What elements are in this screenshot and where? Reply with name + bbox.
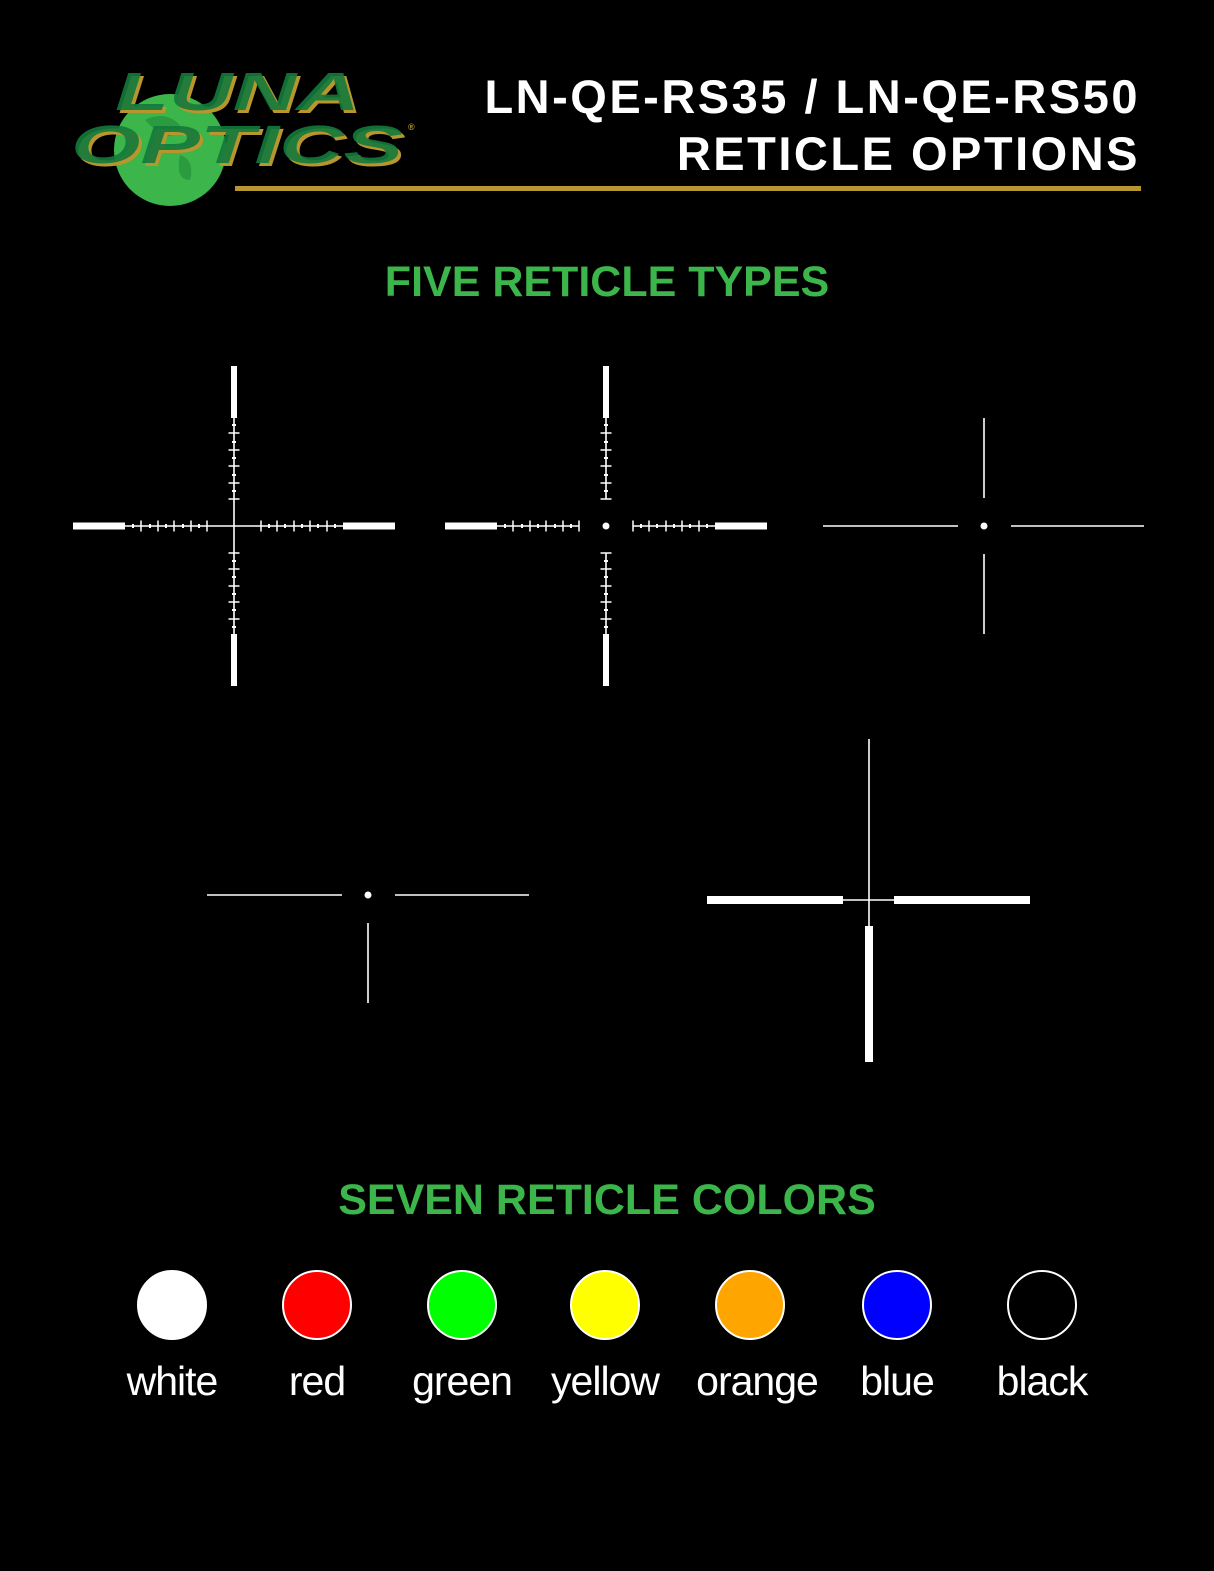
reticle 2 <box>445 366 767 686</box>
color swatches: green <box>412 1358 512 1404</box>
title: LN-QE-RS35 / LN-QE-RS50 <box>484 70 1140 123</box>
color swatches: orange <box>696 1358 818 1404</box>
heading: seven reticle colors: SEVEN RETICLE COLORS <box>338 1176 876 1224</box>
logo text: OPTICS <box>74 118 406 178</box>
logo text: LUNA <box>118 65 363 125</box>
logo text <box>71 62 415 178</box>
logo <box>71 62 415 206</box>
title: RETICLE OPTIONS <box>677 127 1140 180</box>
color swatches: yellow <box>551 1358 659 1404</box>
logo text: OPTICS <box>71 115 403 175</box>
color swatches: red <box>289 1358 345 1404</box>
heading: five reticle types: FIVE RETICLE TYPES <box>385 258 829 306</box>
reticle 4 <box>207 892 529 1003</box>
color swatches <box>126 1270 1088 1404</box>
color swatches: white <box>127 1358 217 1404</box>
color swatches: black <box>997 1358 1087 1404</box>
title <box>484 70 1140 180</box>
color swatches: blue <box>860 1358 934 1404</box>
reticle 1 <box>73 366 395 686</box>
reticle 5 <box>707 739 1030 1062</box>
icon: globe <box>114 94 226 206</box>
reticle 3 <box>823 418 1144 634</box>
logo text: ® <box>408 122 415 132</box>
logo text: LUNA <box>115 62 360 122</box>
